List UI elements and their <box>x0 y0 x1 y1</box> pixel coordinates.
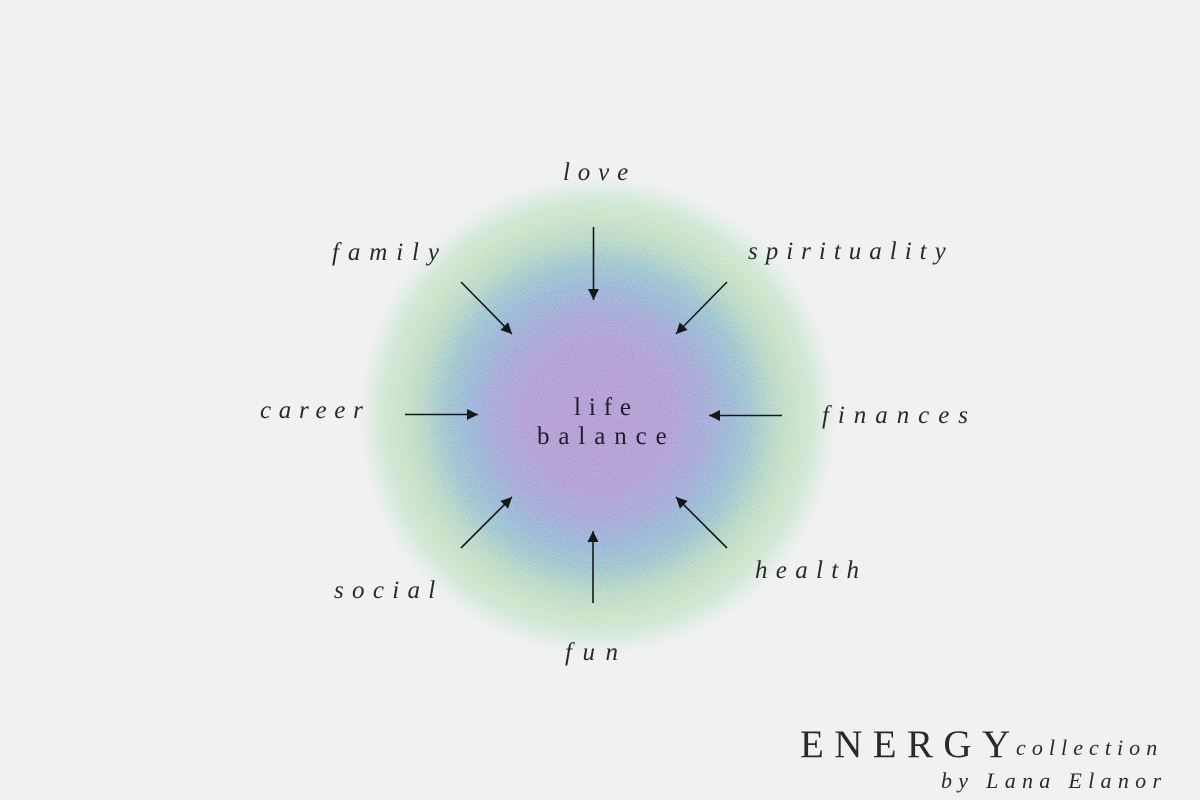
center label: life balance: life <box>574 394 639 421</box>
arrows <box>405 227 782 603</box>
credit: by Lana Elanor: by Lana Elanor <box>941 768 1167 793</box>
label: health: health <box>755 557 867 584</box>
label: fun: fun <box>565 639 628 666</box>
arrow: health <box>676 497 727 548</box>
center label: life balance: balance <box>537 423 676 450</box>
arrow: fun <box>592 531 594 603</box>
arrow: love <box>592 227 594 300</box>
center label: life balance <box>537 394 676 450</box>
arrow: spirituality <box>676 282 727 334</box>
label: finances: finances <box>822 402 977 429</box>
label: family: family <box>332 239 448 266</box>
arrow: family <box>461 282 512 334</box>
label: social: social <box>334 577 444 604</box>
gradient orb <box>365 183 831 648</box>
title: ENERGY: ENERGY <box>800 723 1021 766</box>
label: love: love <box>563 159 636 186</box>
label: spirituality: spirituality <box>748 238 954 265</box>
arrow: finances <box>709 414 782 416</box>
arrow: career <box>405 414 478 416</box>
label: career: career <box>260 397 371 424</box>
arrow: social <box>461 497 512 548</box>
subtitle: collection: collection <box>1016 735 1163 760</box>
